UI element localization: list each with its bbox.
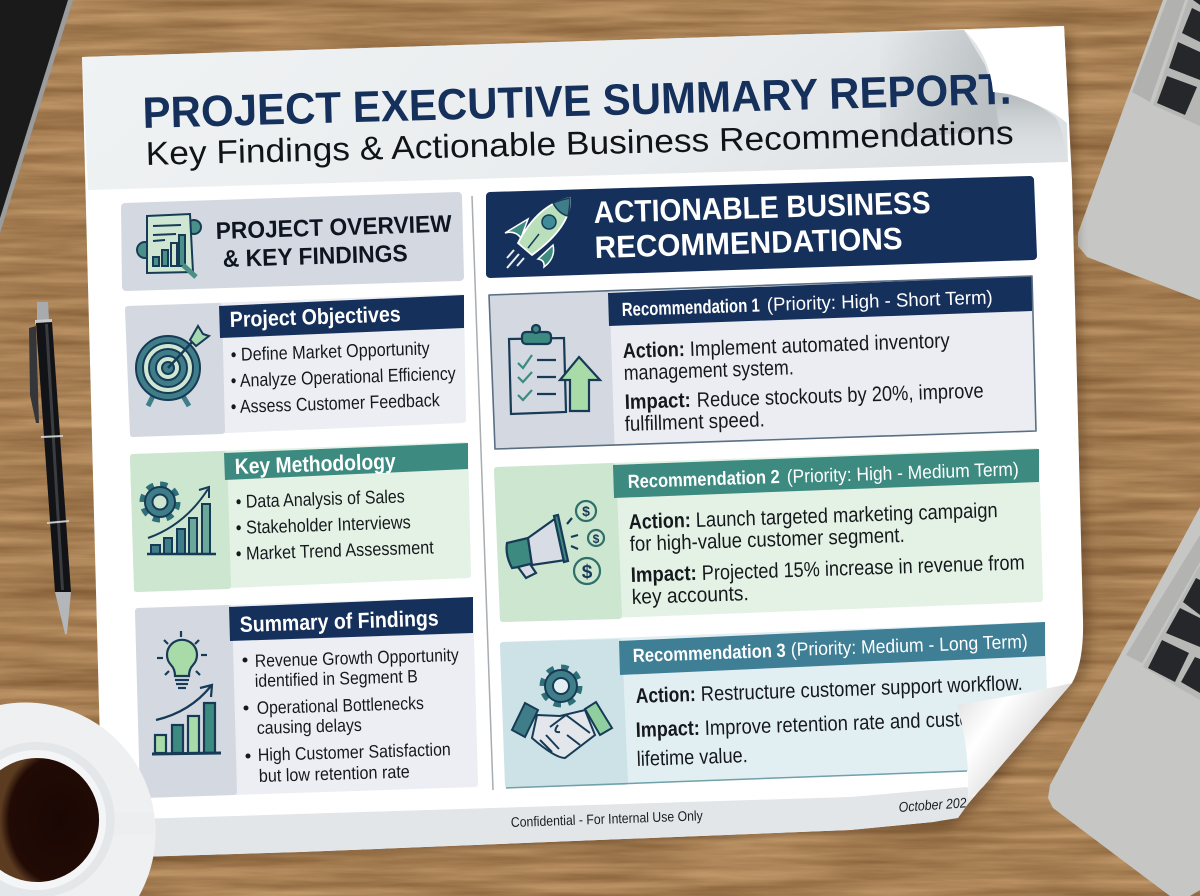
panel: summary of findings <box>138 597 475 795</box>
laptop, top right <box>1078 0 1200 300</box>
footer text <box>511 794 967 830</box>
panel: recommendation 1 <box>489 276 1036 449</box>
recommendation 2 body text: key accounts. <box>631 582 749 609</box>
icon: gear with rising chart <box>143 485 216 554</box>
recommendation 1 body text: Impact: <box>624 389 691 414</box>
recommendation 3 header text: (Priority: Medium - Long Term) <box>790 632 1028 661</box>
recommendation 3 body text: Impact: <box>635 717 700 742</box>
paper sheet <box>82 26 1083 858</box>
bullet list: objectives <box>230 337 457 417</box>
bullet list: findings: causing delays <box>257 715 362 738</box>
recommendation 2 body text: Action: <box>628 509 691 534</box>
heading: actionable business recommendations: RECOMMENDATIONS <box>594 221 903 265</box>
recommendation 1 body text: Reduce stockouts by 20%, improve <box>696 379 984 412</box>
icon: rocket <box>505 198 570 268</box>
top-right page curl <box>964 26 1069 125</box>
panel heading: project overview <box>215 211 452 273</box>
coffee surface <box>0 758 99 882</box>
recommendation 1 body text <box>622 329 984 436</box>
heading: summary of findings: Summary of Findings <box>239 605 439 637</box>
recommendation 2 body text: Launch targeted marketing campaign <box>695 499 998 532</box>
column divider <box>472 196 493 790</box>
recommendation 1 header text: (Priority: High - Short Term) <box>766 288 993 316</box>
pen <box>29 302 71 634</box>
bullet list: findings: High Customer Satisfaction <box>258 739 451 765</box>
recommendation 3 header text: Recommendation 3 <box>632 641 786 667</box>
bullet list: objectives: • Analyze Operational Efficiency <box>230 363 457 391</box>
bullet list: findings: identified in Segment B <box>255 666 418 691</box>
recommendation 2 body text: Impact: <box>630 562 697 587</box>
coffee cup and saucer <box>0 702 156 896</box>
recommendation 1 body text: fulfillment speed. <box>624 408 765 436</box>
icon: target <box>136 326 209 406</box>
panel: key methodology <box>133 443 468 589</box>
recommendation 1 header text: Recommendation 1 <box>621 295 760 321</box>
heading: actionable business recommendations <box>593 185 931 265</box>
panel heading: project overview: & KEY FINDINGS <box>222 240 408 273</box>
recommendation 3 body text: lifetime value. <box>636 744 748 771</box>
recommendation 2 header text <box>627 459 1019 493</box>
heading: actionable business recommendations: ACTIONABLE BUSINESS <box>593 185 931 230</box>
icon: report with chart <box>137 214 201 277</box>
footer band <box>103 787 973 858</box>
footer date: October 202 <box>898 794 967 815</box>
recommendation 2 body text: for high-value customer segment. <box>629 524 905 556</box>
recommendation 3 body text: Restructure customer support workflow. <box>700 672 1023 706</box>
bottom-right page curl <box>957 683 1072 800</box>
bullet list: methodology: • Data Analysis of Sales <box>235 485 405 512</box>
dollar signs: $ <box>593 532 600 546</box>
recommendation 2 body text <box>628 499 1025 609</box>
panel: recommendation 2 <box>497 449 1040 619</box>
panel heading: project overview: PROJECT OVERVIEW <box>215 211 452 245</box>
recommendation 1 body text: Action: <box>622 338 685 363</box>
recommendation 3 body text: Action: <box>635 683 696 708</box>
footer text: Confidential - For Internal Use Only <box>511 807 703 830</box>
subtitle: Key Findings & Actionable Business Recommendations <box>145 114 1014 172</box>
recommendation 2 header text: Recommendation 2 <box>627 467 780 493</box>
panel: recommendation 3 <box>503 622 1045 788</box>
panel: project overview header <box>125 196 460 287</box>
icon: gear and handshake <box>512 668 612 758</box>
tablet in the top-left corner <box>0 0 73 233</box>
bullet list: methodology: • Stakeholder Interviews <box>235 511 411 538</box>
panel: actionable business recommendations header <box>490 180 1033 274</box>
shading under the top-right curl <box>880 30 1067 164</box>
bullet list: findings: but low retention rate <box>259 762 410 786</box>
cup body <box>0 742 115 896</box>
recommendation 1 body text: management system. <box>623 356 794 385</box>
icon: clipboard checklist with up arrow <box>509 325 600 414</box>
icon: megaphone with dollar coins <box>507 501 604 584</box>
bullet list: methodology: • Market Trend Assessment <box>235 536 434 564</box>
icon: light bulb <box>157 631 207 688</box>
recommendation 3 header text <box>632 632 1028 667</box>
bullet list: objectives: • Define Market Opportunity <box>230 337 431 365</box>
recommendation 1 body text: Implement automated inventory <box>689 329 950 361</box>
recommendation 2 header text: (Priority: High - Medium Term) <box>786 459 1019 488</box>
recommendation 2 body text: Projected 15% increase in revenue from <box>701 551 1025 585</box>
title: PROJECT EXECUTIVE SUMMARY REPORT. <box>142 65 1012 138</box>
recommendation 3 body text <box>635 672 1023 771</box>
heading: key methodology: Key Methodology <box>234 449 397 479</box>
bullet list: findings: Operational Bottlenecks <box>257 693 424 718</box>
panel: project objectives <box>128 295 464 434</box>
bullet list: objectives: • Assess Customer Feedback <box>230 389 441 417</box>
dollar signs <box>582 503 600 583</box>
icon: rising bar chart <box>152 685 221 754</box>
cup handle <box>108 812 154 835</box>
bullet list: findings: Revenue Growth Opportunity <box>255 645 459 671</box>
bullet list: methodology <box>235 485 434 564</box>
title <box>142 65 1014 172</box>
heading: project objectives: Project Objectives <box>229 301 401 332</box>
dollar signs: $ <box>582 503 590 519</box>
dollar signs: $ <box>582 562 593 583</box>
recommendation 1 header text <box>621 288 993 321</box>
laptop, bottom right <box>1048 507 1200 896</box>
shadow under the sheet <box>90 34 1090 862</box>
paper header band <box>82 26 1068 190</box>
bullet list: findings <box>242 645 459 786</box>
recommendation 3 body text: Improve retention rate and custo <box>704 708 970 740</box>
